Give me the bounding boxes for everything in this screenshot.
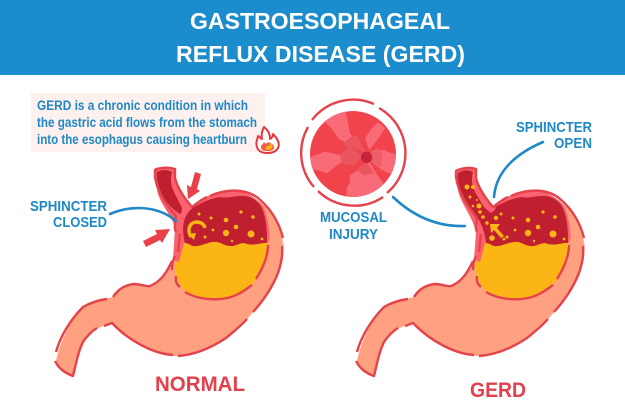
reflux curl arrowhead bbox=[188, 233, 196, 240]
refluxing bubbles in esophagus bbox=[464, 174, 506, 241]
mucosal injury illustration bbox=[301, 100, 405, 206]
title: GASTROESOPHAGEAL bbox=[190, 8, 450, 34]
yellow fill beneath wave bbox=[185, 239, 267, 247]
label: sphincter open: OPEN bbox=[554, 135, 592, 152]
definition callout bbox=[31, 93, 265, 152]
stomach body bbox=[55, 190, 282, 376]
leader line: sphincter closed bbox=[110, 208, 176, 221]
definition callout: the gastric acid flows from the stomach bbox=[37, 115, 257, 130]
acid bubbles bbox=[198, 210, 263, 242]
leader line: mucosal injury bbox=[393, 197, 465, 226]
icon: flame bbox=[256, 127, 279, 153]
leader line: sphincter open bbox=[494, 142, 543, 197]
label: mucosal injury bbox=[320, 209, 387, 243]
definition callout: GERD is a chronic condition in which bbox=[37, 98, 248, 113]
stomach upper wall bbox=[456, 167, 575, 262]
compression arrow: upper bbox=[187, 172, 201, 199]
label: sphincter open bbox=[516, 119, 592, 152]
gastric acid chamber bbox=[183, 196, 267, 246]
label: GERD: GERD bbox=[470, 379, 526, 402]
definition callout: into the esophagus causing heartburn bbox=[37, 132, 247, 147]
stomach body bbox=[356, 190, 583, 376]
label: sphincter closed bbox=[30, 198, 107, 231]
title banner bbox=[0, 0, 625, 75]
compression arrow: lower bbox=[143, 229, 170, 247]
mucosa folds bbox=[324, 110, 365, 152]
label: sphincter closed: SPHINCTER bbox=[30, 198, 107, 215]
label: mucosal injury: MUCOSAL bbox=[320, 209, 387, 226]
reflux curl arrow bbox=[189, 222, 205, 237]
stomach upper wall bbox=[155, 167, 274, 262]
mucosa disc bbox=[310, 111, 396, 197]
esophagus lumen bbox=[157, 170, 182, 214]
acid bubbles bbox=[500, 210, 565, 242]
stomach: GERD bbox=[356, 167, 584, 376]
esophagus and acid chamber bbox=[458, 170, 568, 246]
stomach outline top bbox=[155, 168, 283, 270]
title bbox=[176, 8, 465, 67]
stomach outline top bbox=[456, 168, 584, 270]
yellow fill beneath wave bbox=[486, 239, 568, 247]
salmon side band bbox=[564, 206, 584, 246]
dashed ring bbox=[301, 100, 405, 206]
reflux arrow bbox=[490, 224, 504, 238]
salmon side band bbox=[263, 206, 283, 246]
label: normal: NORMAL bbox=[155, 373, 245, 396]
label: sphincter closed: CLOSED bbox=[53, 214, 107, 231]
title: REFLUX DISEASE (GERD) bbox=[176, 41, 465, 67]
stomach: normal bbox=[55, 167, 283, 376]
label: sphincter open: SPHINCTER bbox=[516, 119, 592, 136]
label: mucosal injury: INJURY bbox=[329, 226, 378, 243]
